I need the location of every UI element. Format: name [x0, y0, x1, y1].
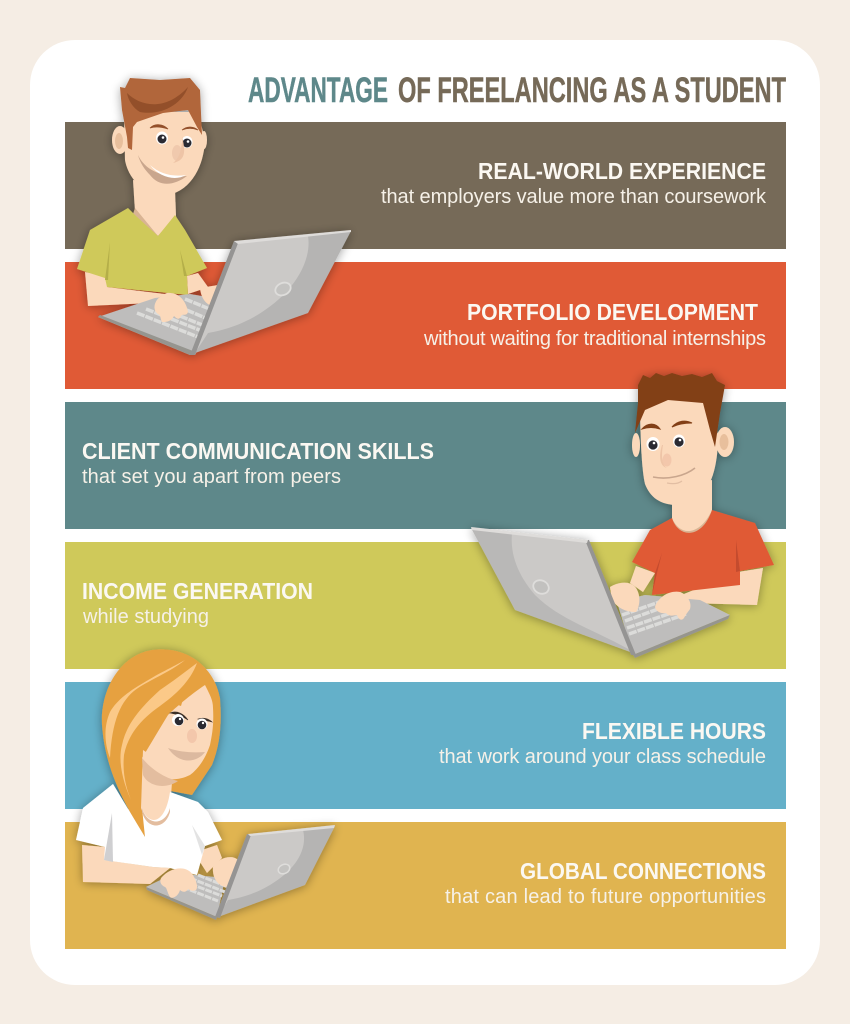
text: flexible hours: that work around your class schedule	[439, 746, 766, 768]
keyboard	[175, 875, 228, 901]
text: client communication skills: CLIENT COMMUNICATION SKILLS	[82, 438, 434, 464]
band: global connections	[65, 822, 786, 949]
band: income generation	[65, 542, 786, 669]
text: real-world experience	[381, 158, 767, 208]
keyboard	[622, 600, 686, 634]
text: global connections: GLOBAL CONNECTIONS	[520, 858, 766, 884]
text: flexible hours	[439, 718, 766, 768]
text: client communication skills: that set you apart from peers	[82, 466, 341, 488]
band: real-world experience	[65, 122, 786, 249]
band: client communication skills	[65, 402, 786, 529]
text: global connections	[445, 858, 766, 908]
text: income generation	[82, 578, 313, 628]
title: ADVANTAGE	[248, 71, 388, 110]
text: portfolio development: PORTFOLIO DEVELOPMENT	[467, 299, 758, 325]
illustration: woman in white shirt with laptop	[76, 649, 335, 920]
illustration: man in green shirt with laptop	[77, 78, 351, 355]
text: income generation: while studying	[82, 606, 209, 628]
illustration: man in red shirt with laptop	[471, 373, 774, 658]
text: global connections: that can lead to future opportunities	[445, 886, 766, 908]
text: flexible hours: FLEXIBLE HOURS	[582, 718, 766, 744]
text: income generation: INCOME GENERATION	[82, 578, 313, 604]
text: client communication skills	[82, 438, 434, 488]
keyboard	[137, 299, 212, 337]
title	[248, 71, 786, 110]
band: portfolio development	[65, 262, 786, 389]
text: real-world experience: REAL-WORLD EXPERIENCE	[478, 158, 766, 184]
text: portfolio development: without waiting for traditional internships	[423, 328, 766, 350]
text: portfolio development	[423, 299, 766, 350]
text: real-world experience: that employers value more than coursework	[381, 186, 767, 208]
band: flexible hours	[65, 682, 786, 809]
